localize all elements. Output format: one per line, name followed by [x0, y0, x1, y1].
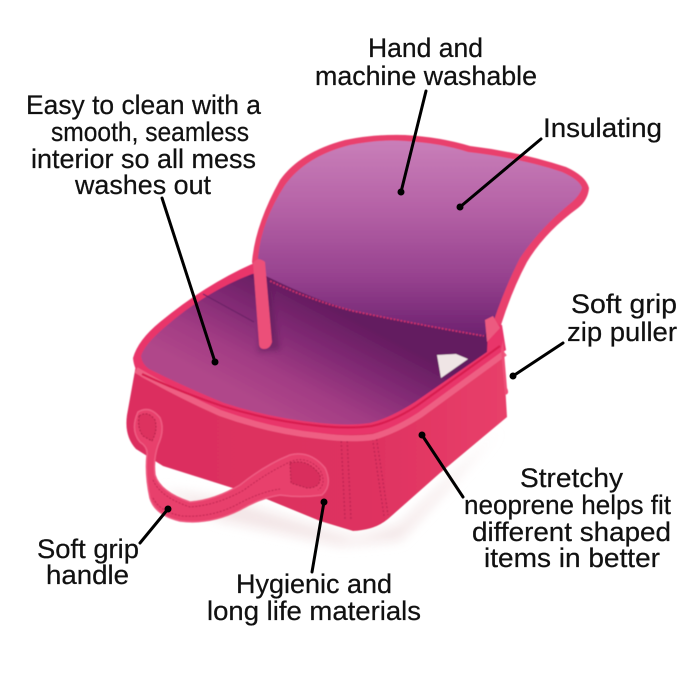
handle stitching — [153, 460, 323, 507]
callout: stretchy neoprene: items in better — [484, 543, 660, 573]
leader lines — [140, 91, 563, 572]
lid purple interior — [258, 140, 582, 336]
callout: stretchy neoprene: different shaped — [472, 517, 671, 547]
callout: hand and machine washable: machine washable — [315, 61, 537, 91]
handle tab right — [290, 462, 320, 488]
callout: soft grip handle — [37, 534, 139, 590]
callout: easy to clean — [26, 90, 262, 200]
callout: soft grip handle: Soft grip — [37, 534, 139, 564]
interior crease — [203, 294, 254, 322]
callout: soft grip zip puller — [567, 289, 677, 347]
callout: insulating: Insulating — [543, 113, 662, 143]
callout: soft grip handle: handle — [46, 560, 129, 590]
handle strap — [134, 410, 328, 522]
bag shadow — [160, 430, 500, 545]
callout: hand and machine washable — [315, 33, 537, 91]
strap shadow — [258, 280, 280, 352]
callout: soft grip zip puller: zip puller — [567, 317, 677, 347]
callout: hand and machine washable: Hand and — [368, 33, 483, 63]
callout: stretchy neoprene: Stretchy — [520, 463, 624, 493]
zip puller — [501, 340, 508, 395]
callout: stretchy neoprene: neoprene helps fit — [464, 490, 671, 520]
leader: washable — [401, 91, 426, 192]
floor purple interior — [141, 270, 488, 424]
leader dots — [164, 188, 516, 512]
bag photo — [126, 135, 589, 545]
side seams — [341, 435, 388, 520]
handle — [134, 410, 328, 522]
callout: soft grip zip puller: Soft grip — [571, 289, 677, 319]
callout: easy to clean: Easy to clean with a — [26, 90, 262, 120]
callout: easy to clean: smooth, seamless — [51, 117, 249, 147]
care label — [437, 354, 468, 378]
handle tab left — [138, 414, 156, 441]
callout: easy to clean: interior so all mess — [31, 144, 256, 174]
leader: stretchy — [422, 435, 463, 497]
callout: easy to clean: washes out — [74, 170, 211, 200]
lower rim outer — [133, 264, 506, 434]
interior strap — [253, 259, 272, 349]
bag outer body — [126, 350, 507, 531]
callout: hygienic materials: long life materials — [207, 596, 421, 626]
callout: hygienic materials — [207, 569, 421, 626]
interior zip seam — [270, 281, 484, 336]
leader: zip puller — [513, 343, 563, 376]
rim trim band — [136, 353, 505, 438]
callout: stretchy neoprene — [464, 463, 671, 573]
rim zip line — [142, 346, 500, 428]
lid outer rim — [252, 135, 589, 340]
leader: insulating — [460, 139, 541, 207]
callout: hygienic materials: Hygienic and — [236, 569, 392, 599]
leader: handle — [140, 509, 168, 543]
leader: hygienic — [312, 502, 324, 572]
leader: easy to clean — [162, 198, 215, 362]
